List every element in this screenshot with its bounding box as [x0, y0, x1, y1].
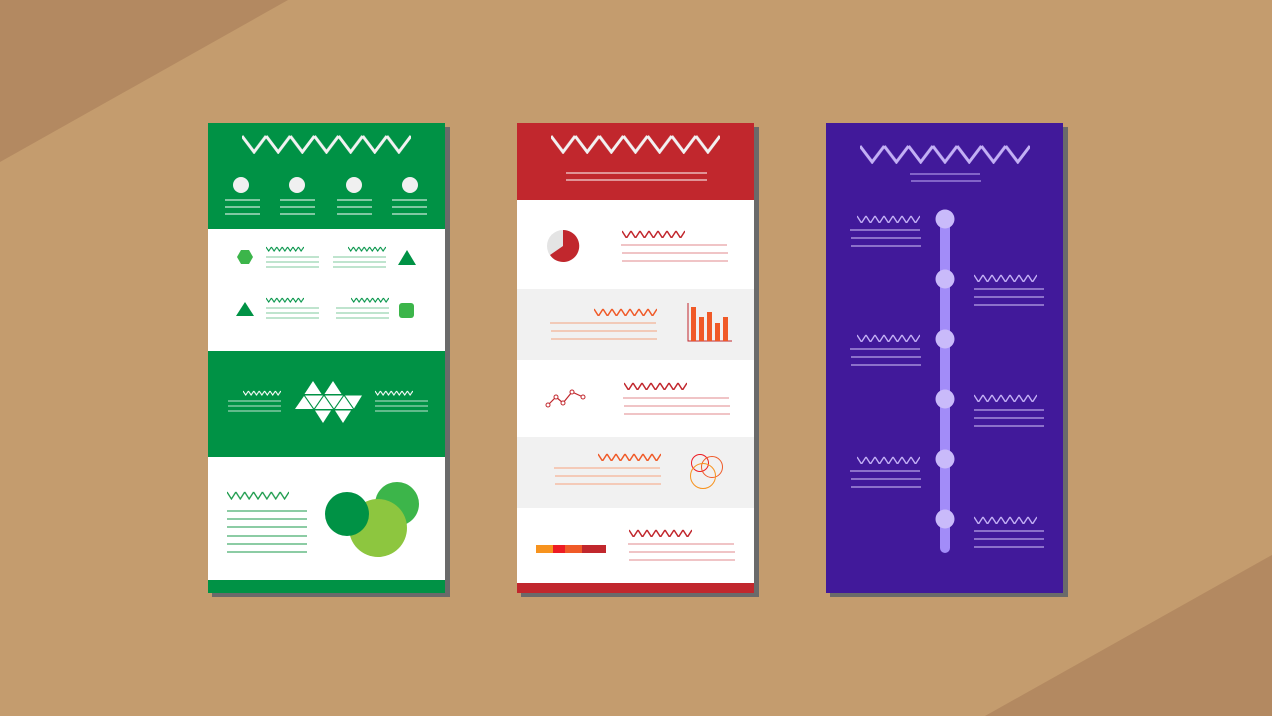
venn circles block	[227, 482, 419, 557]
red header	[517, 123, 754, 200]
line chart row	[546, 382, 730, 414]
shapes list section	[236, 246, 416, 318]
timeline	[936, 210, 954, 553]
panel: green infographic	[208, 123, 450, 597]
circles row	[554, 453, 722, 488]
decoration: top-left corner	[0, 0, 288, 162]
pie chart row	[547, 230, 728, 262]
timeline entries	[850, 215, 1044, 547]
panel: red infographic	[517, 123, 759, 597]
panel: purple timeline infographic	[826, 123, 1068, 597]
bar chart row	[550, 303, 732, 341]
stacked bar row	[536, 529, 735, 560]
green band with triangles	[208, 351, 445, 457]
purple title	[860, 144, 1030, 181]
green header	[208, 123, 445, 229]
decoration: bottom-right corner	[985, 555, 1272, 716]
